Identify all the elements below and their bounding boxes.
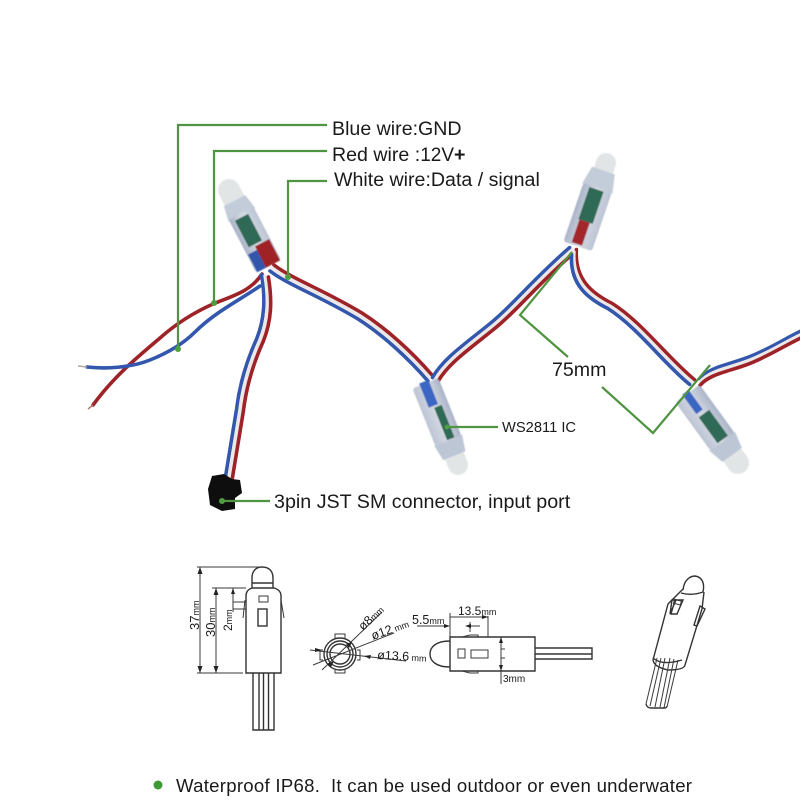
LED pixel 3 (562, 148, 624, 251)
dimension: 13.5mm: 13.5mm (458, 604, 496, 618)
dimension: 8mm diameter: ø8mm (355, 603, 387, 633)
connector: 3-pin JST SM (208, 474, 242, 511)
label: white wire: White wire:Data / signal (334, 169, 540, 191)
cable: LED 3 to LED 4 (571, 250, 694, 384)
label: connector: 3pin JST SM connector, input port (274, 491, 571, 513)
leader: blue wire (175, 125, 327, 352)
cable: LED 2 to LED 3 (433, 248, 574, 382)
LED pixel 1 (211, 173, 282, 273)
drawing: end view with diameters (310, 603, 427, 673)
power wire: red lead (88, 274, 262, 409)
cable: LED 1 to LED 2 (270, 265, 432, 381)
label: red wire: Red wire :12V+ (332, 144, 465, 166)
LED pixel 2 (IC callout) (411, 376, 476, 480)
dimension: 12mm diameter: ø12 mm (369, 616, 411, 643)
label: 75mm: 75mm (552, 359, 606, 381)
dimension: 2mm: 2mm (221, 609, 235, 631)
leader: connector (219, 498, 270, 504)
dimension: 3mm: 3mm (503, 674, 525, 685)
drawing: side view with height dimensions (187, 567, 284, 730)
drawing: perspective view (646, 576, 705, 708)
dimension: 37mm: 37mm (187, 601, 202, 630)
LED pixel 4 (673, 382, 757, 481)
leader: WS2811 IC (444, 424, 498, 430)
cable: LED 4 to the right edge (700, 331, 800, 385)
dimension: 30mm: 30mm (203, 608, 218, 637)
label: IC: WS2811 IC (502, 420, 576, 436)
power wire: blue lead (78, 286, 260, 368)
input cable to connector (226, 275, 271, 478)
dimension: 13.6mm diameter: ø13.6 mm (377, 648, 427, 665)
bracket: 75mm spacing (520, 252, 710, 433)
leader: red wire (211, 151, 327, 306)
dimension: 5.5mm: 5.5mm (412, 613, 444, 627)
drawing: top view with length dimensions (412, 604, 592, 685)
label: blue wire: Blue wire:GND (332, 118, 462, 140)
leader: white wire (285, 181, 327, 280)
feature bullet: Waterproof IP68. It can be used outdoor or even underwater (176, 775, 692, 796)
